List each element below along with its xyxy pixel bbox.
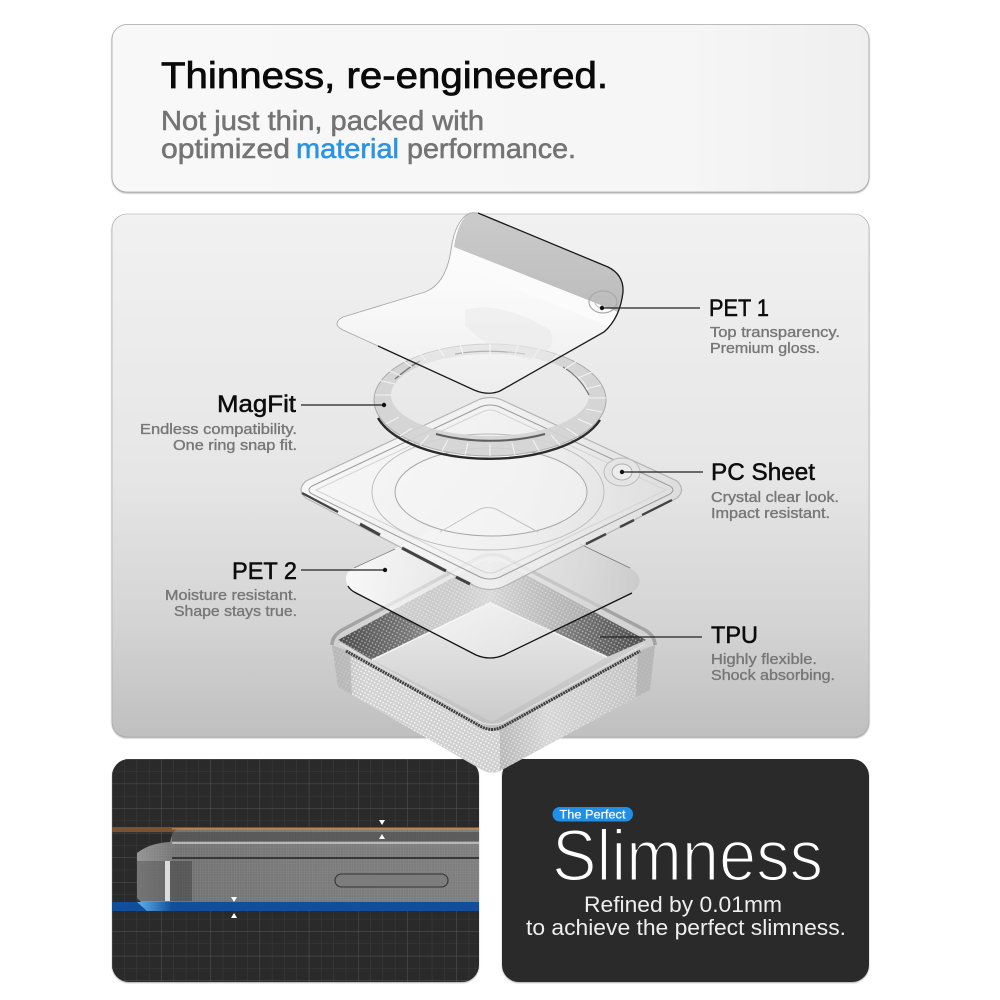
callout: TPU: TPU — [711, 622, 758, 649]
camera ring and magnet circles — [395, 448, 587, 536]
callout: PET 1 — [600, 295, 840, 357]
floor — [372, 603, 607, 722]
layer: PC sheet — [301, 398, 682, 590]
side button — [335, 874, 448, 887]
badge: The Perfect — [560, 810, 626, 822]
callout: MagFit: One ring snap fit. — [173, 438, 297, 454]
panel: measurement diagram — [112, 759, 479, 982]
subtitle: performance. — [407, 133, 576, 164]
callout: PC Sheet — [620, 459, 839, 522]
layer: TPU case — [332, 554, 655, 773]
callout: PET 2 — [165, 558, 387, 620]
callout: MagFit — [140, 391, 386, 454]
panel: exploded layers — [112, 214, 869, 737]
subtitle: optimized — [161, 133, 290, 164]
callout: PET 2: Shape stays true. — [174, 604, 297, 620]
orange band — [112, 827, 479, 832]
callout: PET 1: Premium gloss. — [710, 341, 820, 357]
callout: PET 2: Moisture resistant. — [165, 588, 297, 604]
callout: TPU: Shock absorbing. — [711, 668, 835, 684]
panel: title card — [112, 24, 869, 192]
corners — [332, 645, 352, 695]
rim outline back — [332, 554, 655, 645]
subtitle — [161, 105, 576, 164]
callout: PC Sheet: Impact resistant. — [711, 506, 830, 522]
callout: PET 1: Top transparency. — [710, 325, 840, 341]
callout: TPU: Highly flexible. — [711, 652, 817, 668]
caption: to achieve the perfect slimness. — [526, 915, 846, 940]
gray strip — [454, 212, 623, 312]
subtitle: Not just thin, packed with — [161, 105, 484, 136]
callout: PC Sheet: PC Sheet — [711, 459, 815, 486]
callout: MagFit: MagFit — [217, 391, 296, 418]
blue band — [112, 902, 479, 911]
subtitle: material — [296, 133, 399, 164]
caption: Refined by 0.01mm — [584, 892, 782, 917]
front wall right — [500, 645, 655, 771]
layer: PET 2 — [346, 503, 640, 658]
front wall left — [332, 645, 500, 773]
side buttons — [302, 493, 672, 584]
thickness arrows — [231, 820, 385, 918]
front rim — [346, 651, 640, 730]
phone side view — [137, 828, 479, 902]
layer: PET 1 — [337, 212, 623, 393]
callout: PET 1: PET 1 — [709, 295, 769, 322]
highlight — [448, 247, 618, 327]
caption — [526, 892, 846, 940]
callout: PC Sheet: Crystal clear look. — [711, 490, 839, 506]
title: Thinness, re-engineered. — [161, 55, 608, 96]
callout: PET 2: PET 2 — [232, 558, 297, 585]
panel: slimness — [502, 759, 869, 982]
callout: MagFit: Endless compatibility. — [140, 422, 297, 438]
layer: MagFit ring — [374, 344, 606, 459]
callout: TPU — [600, 622, 835, 684]
back walls — [338, 561, 490, 660]
heading: Slimness: Slimness — [552, 816, 823, 896]
badge — [552, 807, 633, 822]
